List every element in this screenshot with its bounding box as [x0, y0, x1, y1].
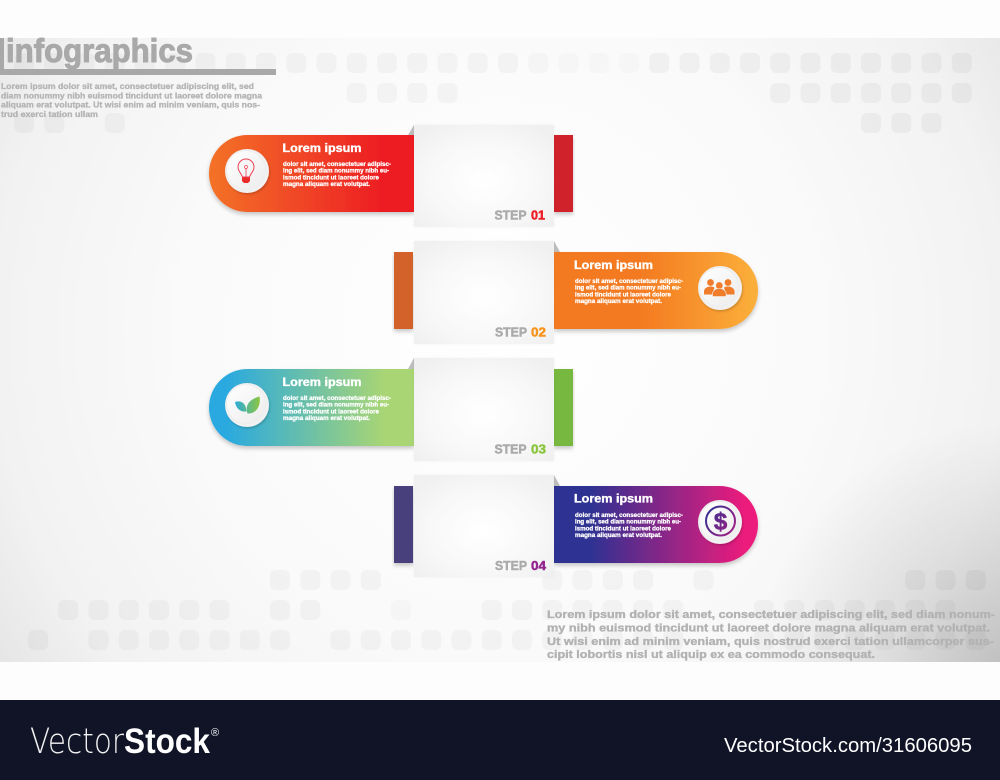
step 03 text — [283, 396, 391, 422]
icon: people — [698, 266, 742, 310]
step 01 text — [283, 162, 391, 188]
footer logo: ® — [211, 727, 219, 739]
step 01 label: 01 — [531, 208, 545, 222]
step 04 heading: Lorem ipsum — [574, 492, 653, 506]
closing text block: cipit lobortis nisl ut aliquip ex ea commodo consequat. — [547, 649, 875, 661]
closing text block: Ut wisi enim ad minim veniam, quis nostrud exerci tation ullamcorper sus- — [547, 636, 994, 648]
step 01 text: ismod tincidunt ut laoreet dolore — [283, 175, 380, 181]
step 02 band — [554, 252, 758, 329]
step 04 label — [495, 558, 547, 573]
intro text block: aliquam erat volutpat. Ut wisi enim ad minim veniam, quis nos- — [1, 100, 260, 110]
step 02 — [394, 241, 758, 344]
step 01 label: STEP — [494, 208, 527, 222]
step 02 fold — [554, 241, 560, 252]
step 02 text — [575, 279, 683, 305]
step 01 text: magna aliquam erat volutpat. — [283, 182, 370, 188]
step 03 fold — [408, 358, 414, 369]
step 02 label — [495, 324, 546, 340]
step 01 band — [209, 135, 414, 212]
closing text block: my nibh euismod tincidunt ut laoreet dolore magna aliquam erat volutpat. — [547, 622, 990, 634]
step 02 label: 02 — [531, 324, 546, 340]
step 04 text: ismod tincidunt ut laoreet dolore — [575, 526, 672, 532]
step 03 text: magna aliquam erat volutpat. — [283, 416, 370, 422]
footer logo: Vector — [30, 722, 125, 762]
step 04 label: 04 — [531, 558, 547, 573]
step 01 text: dolor sit amet, consectetuer adipisc- — [283, 162, 391, 168]
step 01 text: ing elit, sed diam nonummy nibh eu- — [283, 169, 389, 175]
step 03 label — [494, 442, 546, 456]
step 04 fold — [554, 475, 560, 486]
step 04 text — [575, 513, 683, 539]
step 01 back tab — [554, 135, 573, 212]
icon: dollar coin: $ — [714, 508, 728, 536]
step 02 text: ismod tincidunt ut laoreet dolore — [575, 292, 672, 298]
step 03 card — [414, 358, 554, 461]
step 03 back tab — [554, 369, 573, 446]
step 02 text: ing elit, sed diam nonummy nibh eu- — [575, 286, 681, 292]
heading: infographics — [0, 32, 276, 75]
footer bar — [0, 700, 1000, 780]
step 03 label: STEP — [494, 442, 527, 456]
step 04 text: magna aliquam erat volutpat. — [575, 533, 662, 539]
footer logo — [30, 722, 219, 762]
step 04 text: dolor sit amet, consectetuer adipisc- — [575, 513, 683, 519]
step 01 heading: Lorem ipsum — [282, 141, 362, 155]
step 01 fold — [408, 125, 414, 135]
step 03 band — [209, 369, 414, 446]
icon: leaves — [225, 383, 269, 427]
step 04 — [394, 475, 758, 577]
step 02 label: STEP — [495, 324, 527, 340]
step 04 label: STEP — [495, 558, 527, 573]
step 01 — [209, 125, 573, 227]
closing text block: Lorem ipsum dolor sit amet, consectetuer adipiscing elit, sed diam nonum- — [547, 609, 995, 621]
step 03 text: ing elit, sed diam nonummy nibh eu- — [283, 403, 389, 409]
step 04 card — [414, 475, 554, 577]
icon: dollar coin — [698, 500, 742, 544]
intro text block: diam nonummy nibh euismod tincidunt ut laoreet dolore magna — [1, 90, 262, 100]
background panel — [0, 38, 1000, 662]
step 03 label: 03 — [531, 442, 546, 456]
step 02 back tab — [394, 252, 413, 329]
footer logo: Stock — [124, 722, 210, 761]
heading: infographics: infographics — [6, 32, 193, 69]
step 03 text: dolor sit amet, consectetuer adipisc- — [283, 396, 391, 402]
step 01 label — [494, 208, 545, 222]
intro text block: Lorem ipsum dolor sit amet, consectetuer adipiscing elit, sed — [1, 81, 254, 91]
icon: light bulb — [225, 149, 269, 193]
step 02 card — [414, 241, 554, 344]
step 04 band — [554, 486, 758, 563]
footer id: VectorStock.com/31606095 — [724, 735, 972, 757]
step 04 back tab — [394, 486, 413, 563]
intro text block: trud exerci tation ullam — [1, 109, 98, 119]
step 02 heading: Lorem ipsum — [574, 258, 653, 272]
step 03 — [209, 358, 573, 461]
step 02 text: dolor sit amet, consectetuer adipisc- — [575, 279, 683, 285]
step 04 text: ing elit, sed diam nonummy nibh eu- — [575, 520, 681, 526]
step 01 card — [414, 125, 554, 227]
closing text block — [547, 609, 995, 661]
intro text block — [1, 81, 262, 119]
step 02 text: magna aliquam erat volutpat. — [575, 299, 662, 305]
step 03 heading: Lorem ipsum — [282, 375, 362, 389]
step 03 text: ismod tincidunt ut laoreet dolore — [283, 409, 380, 415]
